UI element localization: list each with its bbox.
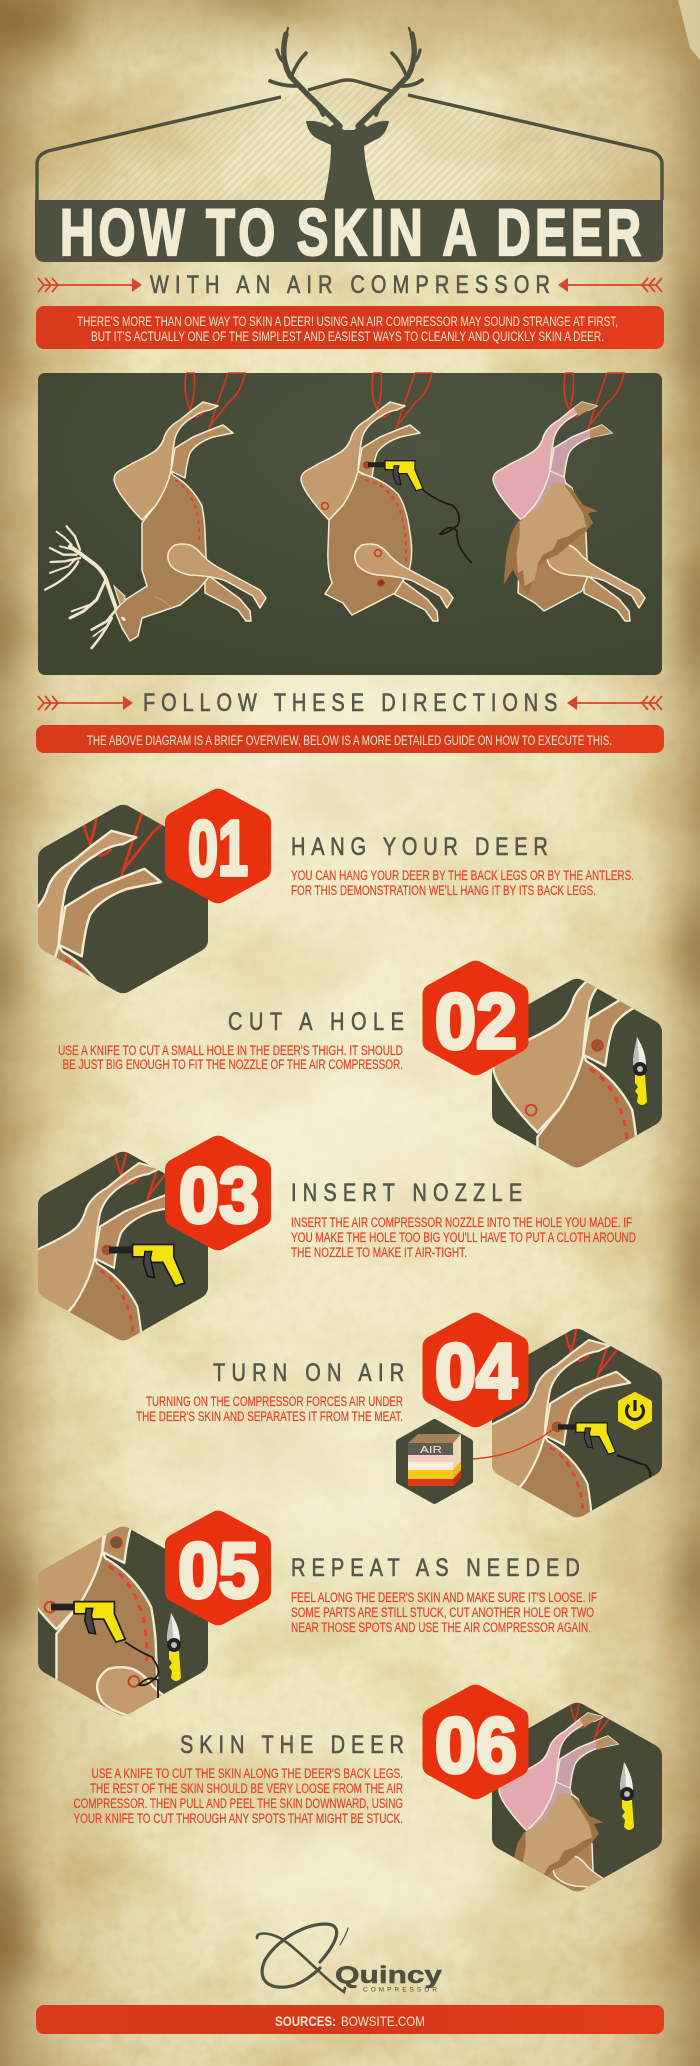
logo tagline: COMPRESSOR bbox=[363, 1986, 437, 1994]
step 5 illustration bbox=[38, 1526, 208, 1716]
deer 1: intact with antlers bbox=[45, 373, 266, 648]
icon: air gun bbox=[109, 1244, 185, 1286]
step 3 illustration bbox=[38, 1152, 208, 1340]
step 2 illustration bbox=[492, 978, 662, 1168]
step 3 bbox=[38, 1136, 636, 1340]
icon: air gun bbox=[51, 1602, 125, 1642]
logo wordmark: Quincy bbox=[335, 1962, 443, 1989]
step 5 text: FEEL ALONG THE DEER'S SKIN AND MAKE SURE IT'S LOOSE. IF bbox=[291, 1590, 597, 1605]
gun cord bbox=[422, 489, 472, 563]
directions banner bbox=[36, 725, 664, 753]
subtitle: WITH AN AIR COMPRESSOR bbox=[150, 271, 550, 299]
step 4 badge: 04 bbox=[435, 1327, 517, 1415]
icon: knife bbox=[620, 1762, 634, 1830]
step 5 text bbox=[291, 1590, 597, 1635]
icon: knife bbox=[633, 1037, 647, 1105]
step 6 text: YOUR KNIFE TO CUT THROUGH ANY SPOTS THAT MIGHT BE STUCK. bbox=[74, 1811, 403, 1826]
step 3 heading: INSERT NOZZLE bbox=[291, 1179, 522, 1207]
step 6 text: THE REST OF THE SKIN SHOULD BE VERY LOOSE FROM THE AIR bbox=[90, 1781, 403, 1796]
icon: power button bbox=[620, 1394, 650, 1428]
intro text bbox=[77, 314, 618, 344]
title: HOW TO SKIN A DEER bbox=[60, 196, 641, 270]
step 6 text: USE A KNIFE TO CUT THE SKIN ALONG THE DEER'S BACK LEGS. bbox=[92, 1766, 403, 1781]
step 5 badge bbox=[165, 1511, 271, 1625]
step 2 badge bbox=[422, 961, 528, 1075]
arrow: left subtitle bbox=[38, 278, 142, 292]
step 5 text: NEAR THOSE SPOTS AND USE THE AIR COMPRESSOR AGAIN. bbox=[291, 1620, 591, 1635]
roof outline bbox=[37, 80, 662, 200]
deer 3: skin peeled bbox=[493, 373, 645, 621]
step 2 text bbox=[58, 1043, 403, 1072]
step 5 bbox=[38, 1510, 597, 1716]
step 6 heading: SKIN THE DEER bbox=[180, 1731, 404, 1759]
logo swoosh bbox=[257, 1924, 348, 1992]
step 1 heading: HANG YOUR DEER bbox=[291, 833, 548, 861]
section heading: FOLLOW THESE DIRECTIONS bbox=[143, 689, 557, 717]
step 4 text: TURNING ON THE COMPRESSOR FORCES AIR UNDER bbox=[146, 1394, 403, 1409]
icon: air gun bbox=[558, 1423, 616, 1454]
step 5 badge: 05 bbox=[178, 1526, 259, 1614]
step 4 callout: air under skin bbox=[399, 1422, 470, 1501]
fur bbox=[504, 483, 598, 595]
step 1 badge bbox=[165, 789, 271, 903]
step 4 illustration bbox=[492, 1328, 662, 1518]
step 6 text: COMPRESSOR. THEN PULL AND PEEL THE SKIN DOWNWARD, USING bbox=[74, 1796, 403, 1811]
step 1 text: FOR THIS DEMONSTRATION WE'LL HANG IT BY ITS BACK LEGS. bbox=[291, 883, 596, 898]
step 2 text: BE JUST BIG ENOUGH TO FIT THE NOZZLE OF THE AIR COMPRESSOR. bbox=[62, 1057, 403, 1072]
sources banner bbox=[36, 2005, 664, 2034]
step 5 heading: REPEAT AS NEEDED bbox=[291, 1554, 580, 1582]
step 2 text: USE A KNIFE TO CUT A SMALL HOLE IN THE DEER'S THIGH. IT SHOULD bbox=[58, 1043, 403, 1058]
title band bbox=[35, 200, 663, 262]
step 1 text bbox=[291, 868, 634, 898]
header emblem bbox=[35, 28, 663, 270]
icon: deer head silhouette with antlers bbox=[270, 28, 422, 200]
step 4 badge bbox=[422, 1313, 528, 1427]
panel: three-deer overview diagram bbox=[38, 373, 662, 675]
step 2 bbox=[58, 960, 662, 1168]
gun cord bbox=[125, 1642, 158, 1698]
step 6 bbox=[74, 1684, 662, 1892]
step 1 bbox=[38, 788, 634, 994]
deer 2: inflated with holes and nozzle bbox=[301, 373, 472, 621]
step 2 badge: 02 bbox=[435, 977, 517, 1065]
air gun bbox=[368, 461, 423, 491]
sources banner: BOWSITE.COM bbox=[341, 2013, 425, 2029]
step 4 callout: air under skin: AIR bbox=[420, 1445, 442, 1456]
step 6 text bbox=[74, 1766, 403, 1826]
step 6 illustration bbox=[492, 1702, 662, 1892]
step 4 text bbox=[136, 1394, 403, 1424]
arrow: right subtitle bbox=[558, 278, 662, 292]
icon: knife bbox=[167, 1613, 181, 1681]
arrow: right directions bbox=[567, 696, 662, 710]
step 1 badge: 01 bbox=[188, 804, 248, 892]
step 6 badge: 06 bbox=[435, 1701, 517, 1789]
step 3 text: THE NOZZLE TO MAKE IT AIR-TIGHT. bbox=[291, 1245, 467, 1260]
step 6 badge bbox=[422, 1685, 528, 1799]
step 3 text bbox=[291, 1215, 636, 1260]
step 1 illustration bbox=[38, 804, 208, 994]
intro banner bbox=[36, 306, 664, 349]
gun cord bbox=[617, 1455, 650, 1482]
arrow: left directions bbox=[38, 696, 133, 710]
step 4 heading: TURN ON AIR bbox=[213, 1359, 404, 1387]
sources banner: SOURCES: bbox=[275, 2013, 336, 2029]
holes bbox=[322, 462, 384, 586]
logo: Quincy Compressor bbox=[257, 1924, 443, 1994]
callout line bbox=[473, 1427, 556, 1459]
step 4 text: THE DEER'S SKIN AND SEPARATES IT FROM THE MEAT. bbox=[136, 1409, 403, 1424]
step 4 bbox=[136, 1312, 662, 1518]
step 5 text: SOME PARTS ARE STILL STUCK, CUT ANOTHER HOLE OR TWO bbox=[291, 1605, 594, 1620]
step 3 badge bbox=[165, 1136, 271, 1250]
step 3 badge: 03 bbox=[179, 1151, 259, 1239]
step 2 heading: CUT A HOLE bbox=[228, 1008, 404, 1036]
